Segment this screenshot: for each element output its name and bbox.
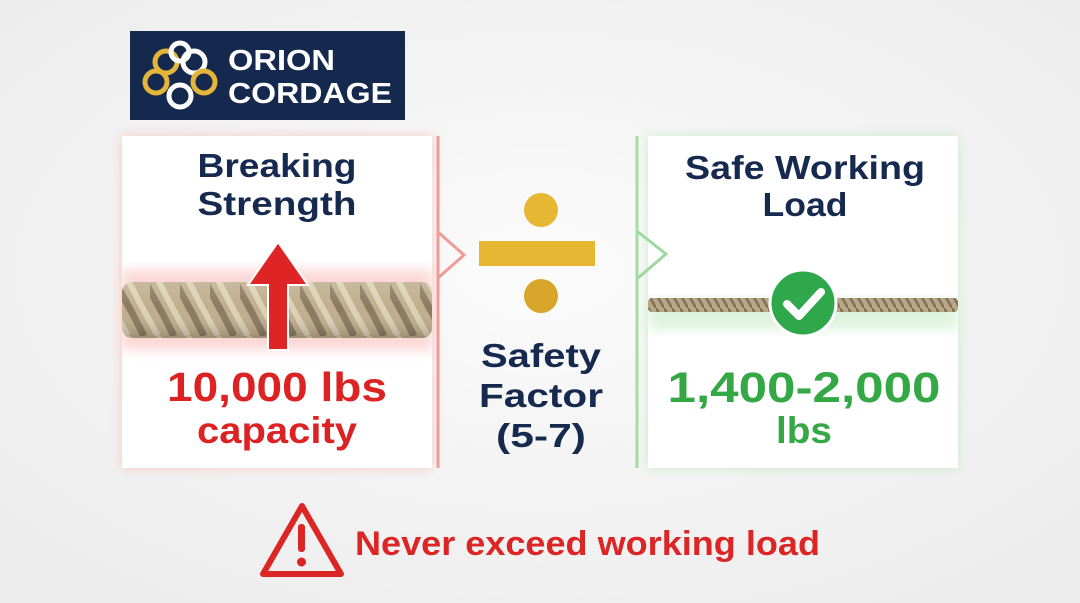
- icon: red up arrow: [248, 242, 308, 350]
- rope thin: [648, 298, 958, 312]
- warning: [263, 506, 820, 574]
- panel: breaking strength: capacity: [197, 410, 357, 451]
- warning: Never exceed working load: [355, 525, 820, 563]
- text: safety factor: Factor: [479, 377, 603, 414]
- arrow: to divide: [400, 232, 464, 278]
- logo: CORDAGE: [228, 78, 392, 110]
- icon: divide: [479, 193, 595, 313]
- panel: safe working load: lbs: [776, 410, 832, 451]
- value: 10,000 lbs: [167, 364, 387, 410]
- icon: check: [770, 270, 836, 336]
- text: safety factor: Safety: [481, 337, 602, 374]
- rope thick: [122, 282, 432, 338]
- heading: Breaking: [198, 147, 356, 184]
- icon: knot logo: [145, 43, 215, 107]
- panel: breaking strength: [122, 136, 438, 468]
- logo: ORION: [228, 45, 335, 77]
- panel: safe working load: [637, 136, 958, 468]
- panel: breaking strength: Strength: [198, 185, 356, 222]
- panel: safe working load: Load: [762, 186, 848, 223]
- text: safety factor: [479, 337, 603, 454]
- arrow: to safe load: [595, 232, 666, 278]
- icon: warning triangle: [263, 506, 341, 574]
- text: safety factor: (5-7): [496, 417, 586, 454]
- panel: safe working load: 1,400-2,000: [668, 364, 940, 412]
- logo: [130, 31, 405, 120]
- panel: safe working load: Safe Working: [685, 149, 925, 186]
